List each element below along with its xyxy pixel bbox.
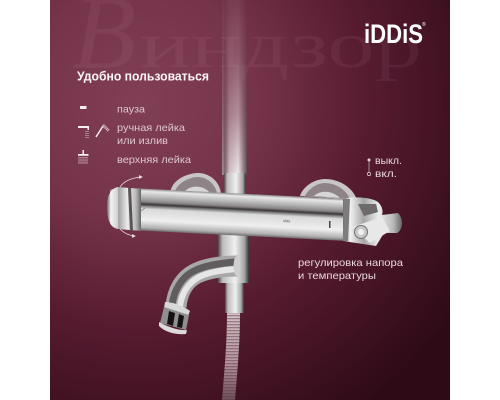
panel: background <box>50 0 450 400</box>
icon: switch on off <box>367 158 371 176</box>
hose <box>222 313 240 400</box>
label: overhead shower: верхняя лейка <box>117 154 191 166</box>
label: hand shower: или излив <box>117 135 168 147</box>
arrow: rotate up <box>120 176 142 187</box>
label: hand shower: ручная лейка <box>117 122 185 134</box>
wall mount: left <box>170 173 221 194</box>
right handle <box>343 197 402 246</box>
vertical pipe <box>222 0 247 197</box>
label: pause: пауза <box>117 104 145 116</box>
heading: Удобно пользоваться <box>77 70 209 84</box>
label: pressure and temperature: регулировка напора <box>298 257 403 269</box>
thermostat body <box>130 188 344 241</box>
left cap <box>107 187 141 231</box>
label: switch on off: выкл. <box>375 155 402 167</box>
icon: overhead shower <box>78 150 88 164</box>
wall mount: right <box>300 179 357 200</box>
icon: spout <box>78 126 89 138</box>
logo: iddis: ® <box>422 21 426 28</box>
label: pressure and temperature <box>298 257 403 282</box>
thermostat body: iddis <box>283 219 291 223</box>
label: switch on off: вкл. <box>375 168 397 180</box>
icon: hand shower <box>96 125 109 137</box>
icon: pause <box>80 106 86 109</box>
watermark: collection name: индзор <box>140 9 422 82</box>
spout <box>159 256 240 334</box>
label: pressure and temperature: и температуры <box>298 270 376 282</box>
logo: iddis: iDDiS <box>364 19 423 49</box>
arrow: rotate down <box>120 229 135 238</box>
label: hand shower <box>117 122 185 147</box>
lower stem <box>218 232 249 313</box>
watermark: collection name <box>72 0 422 91</box>
label: switch on off <box>375 155 402 180</box>
